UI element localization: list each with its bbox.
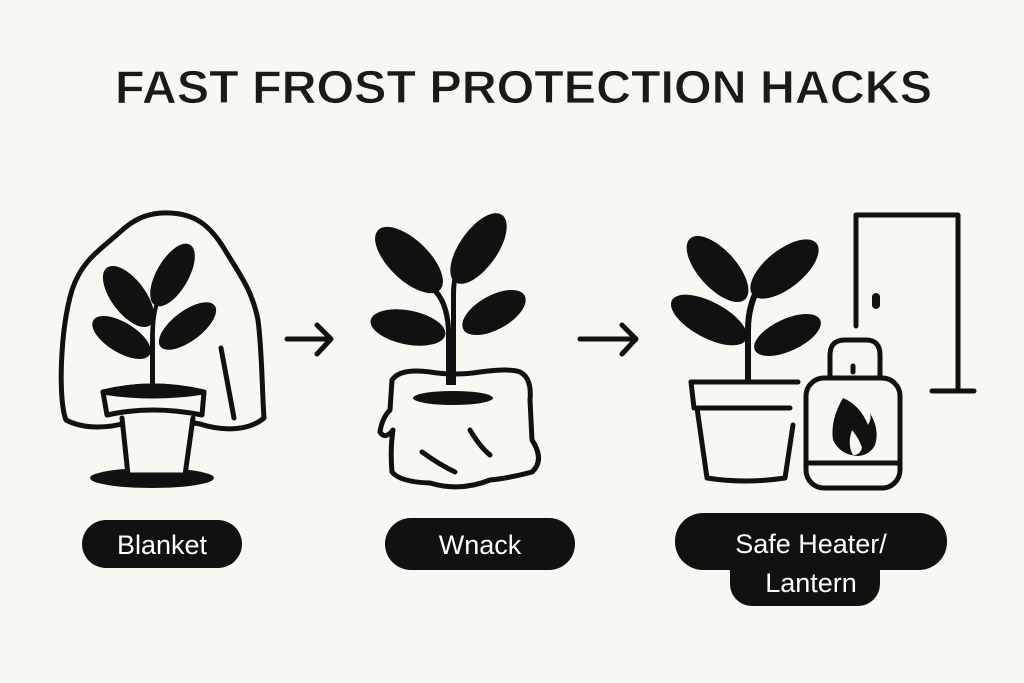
icon: plant (86, 237, 224, 385)
icon: lantern (806, 340, 900, 488)
panel: heater (663, 215, 974, 488)
label: Blanket: Blanket (117, 530, 208, 560)
title: FAST FROST PROTECTION HACKS (115, 61, 932, 113)
panel: wnack (364, 204, 538, 487)
icon: plant 3 (663, 226, 828, 382)
panel: blanket (61, 213, 264, 488)
arrow 2 (580, 325, 636, 354)
icon: door (856, 215, 974, 391)
label: Safe Heater/Lantern (675, 513, 947, 606)
icon: flame (832, 398, 877, 456)
icon: pot (90, 386, 214, 488)
label: Safe Heater/Lantern: Safe Heater/ (735, 529, 887, 559)
icon: pot 3 (691, 382, 798, 481)
icon: wrap bag (380, 370, 538, 487)
label: Wnack: Wnack (439, 530, 522, 560)
label: Safe Heater/Lantern: Lantern (765, 568, 857, 598)
arrow 1 (287, 325, 331, 354)
icon: plant 2 (364, 204, 533, 385)
label: Wnack (385, 518, 575, 570)
label: Blanket (82, 520, 242, 568)
icon: blanket cloth (61, 213, 264, 429)
